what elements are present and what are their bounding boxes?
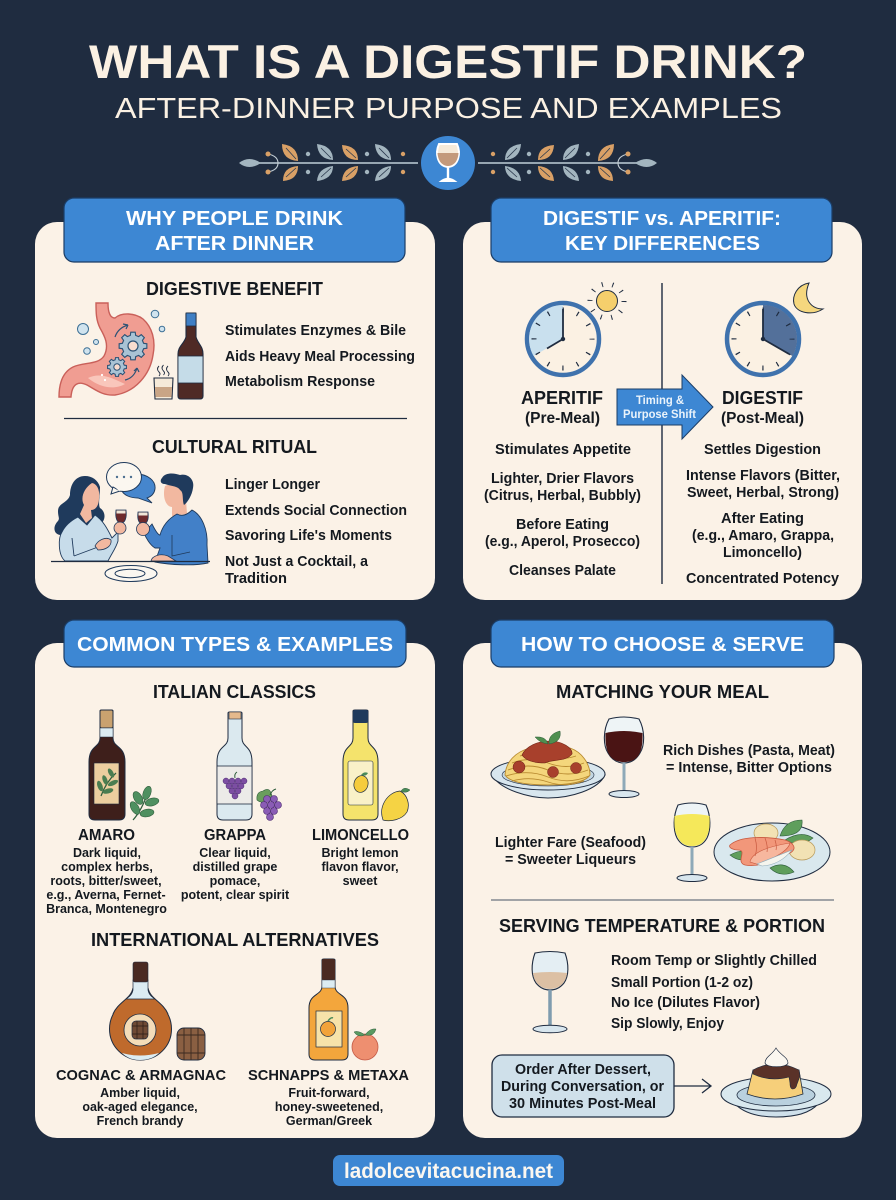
callout: when to order bbox=[492, 1055, 674, 1117]
heading: serving temperature and portion: SERVING TEMPERATURE & PORTION bbox=[499, 916, 825, 936]
list: digestif traits: Intense Flavors (Bitter, bbox=[686, 468, 840, 484]
list: aperitif traits bbox=[484, 442, 641, 579]
heading: international alternatives: INTERNATIONAL ALTERNATIVES bbox=[91, 930, 379, 950]
list: digestif traits: After Eating bbox=[721, 511, 804, 527]
label: schnapps and metaxa: honey-sweetened, bbox=[275, 1100, 383, 1114]
panel heading: HOW TO CHOOSE & SERVE bbox=[521, 634, 804, 656]
label: grappa: GRAPPA bbox=[204, 827, 266, 844]
arrow: timing and purpose shift bbox=[617, 375, 713, 439]
panel heading bbox=[64, 620, 406, 667]
label: amaro bbox=[46, 827, 167, 916]
panel heading: DIGESTIF vs. APERITIF: bbox=[543, 208, 781, 230]
panel: why people drink after dinner bbox=[35, 198, 435, 600]
heading: italian classics: ITALIAN CLASSICS bbox=[153, 682, 316, 702]
list: serving tips bbox=[611, 953, 817, 1032]
label: cognac and armagnac: Amber liquid, bbox=[100, 1086, 180, 1100]
label: aperitif: APERITIF bbox=[521, 388, 603, 408]
list: digestif traits: Settles Digestion bbox=[704, 442, 821, 458]
label: amaro: Branca, Montenegro bbox=[46, 902, 167, 916]
label: cognac and armagnac: oak-aged elegance, bbox=[82, 1100, 198, 1114]
list: digestive benefits: Aids Heavy Meal Processing bbox=[225, 349, 415, 365]
list: cultural ritual points bbox=[225, 477, 407, 587]
title: WHAT IS A DIGESTIF DRINK? bbox=[89, 35, 807, 88]
list: cultural ritual points: Extends Social Connection bbox=[225, 503, 407, 519]
panel heading: KEY DIFFERENCES bbox=[565, 233, 760, 255]
footer: website bbox=[333, 1155, 564, 1186]
label: schnapps and metaxa bbox=[248, 1067, 409, 1128]
label: amaro: complex herbs, bbox=[61, 860, 153, 874]
icon: grappa bottle bbox=[217, 712, 282, 820]
list: serving tips: Small Portion (1-2 oz) bbox=[611, 975, 753, 991]
label: schnapps and metaxa: German/Greek bbox=[286, 1114, 372, 1128]
label: cognac and armagnac: COGNAC & ARMAGNAC bbox=[56, 1067, 226, 1084]
label: aperitif: (Pre-Meal) bbox=[525, 410, 600, 427]
label: grappa: potent, clear spirit bbox=[181, 888, 290, 902]
icon: aperitif clock with sun bbox=[527, 284, 624, 375]
label: grappa: pomace, bbox=[210, 874, 260, 888]
icon: digestif clock with moon bbox=[727, 283, 823, 375]
list: cultural ritual points: Tradition bbox=[225, 571, 287, 587]
callout: when to order: Order After Dessert, bbox=[515, 1062, 651, 1078]
list: aperitif traits: (e.g., Aperol, Prosecco) bbox=[485, 534, 640, 550]
label: grappa: Clear liquid, bbox=[199, 846, 271, 860]
label: limoncello: Bright lemon bbox=[321, 846, 399, 860]
list: digestive benefits bbox=[225, 323, 415, 390]
icon: schnapps bottle and peach bbox=[309, 959, 378, 1060]
panel heading: WHY PEOPLE DRINK bbox=[126, 208, 344, 230]
icon: couple toasting at table bbox=[51, 462, 210, 582]
label: amaro: AMARO bbox=[78, 827, 135, 844]
label: limoncello: LIMONCELLO bbox=[312, 827, 409, 844]
label: schnapps and metaxa: Fruit-forward, bbox=[288, 1086, 370, 1100]
list: aperitif traits: Stimulates Appetite bbox=[495, 442, 631, 458]
arrow: timing and purpose shift: Timing & bbox=[636, 393, 684, 407]
list: aperitif traits: Lighter, Drier Flavors bbox=[491, 471, 634, 487]
label: limoncello: flavon flavor, bbox=[321, 860, 399, 874]
list: aperitif traits: Cleanses Palate bbox=[509, 563, 616, 579]
label: cognac and armagnac bbox=[56, 1067, 226, 1128]
icon: limoncello bottle bbox=[343, 710, 410, 821]
icon: flan dessert bbox=[721, 1048, 831, 1117]
icon: seafood plate bbox=[714, 820, 830, 881]
label: amaro: e.g., Averna, Fernet- bbox=[46, 888, 166, 902]
label: digestif: (Post-Meal) bbox=[721, 410, 804, 427]
label: limoncello: sweet bbox=[343, 874, 378, 888]
label: cognac and armagnac: French brandy bbox=[97, 1114, 183, 1128]
icon: red wine glass bbox=[604, 717, 644, 798]
label: amaro: Dark liquid, bbox=[73, 846, 141, 860]
icon: pasta plate bbox=[491, 731, 605, 798]
icon: cognac bottle and barrel bbox=[110, 962, 205, 1060]
arrow: timing and purpose shift: Purpose Shift bbox=[623, 407, 696, 421]
icon: stomach with gears bbox=[59, 303, 165, 397]
icon: amaro bottle bbox=[89, 710, 160, 820]
callout: when to order: During Conversation, or bbox=[501, 1079, 664, 1095]
label: aperitif bbox=[521, 388, 603, 427]
arrow: callout to dessert bbox=[674, 1079, 711, 1093]
list: serving tips: No Ice (Dilutes Flavor) bbox=[611, 995, 760, 1011]
label: limoncello bbox=[312, 827, 409, 888]
label: schnapps and metaxa: SCHNAPPS & METAXA bbox=[248, 1067, 409, 1084]
text: lighter fare: = Sweeter Liqueurs bbox=[505, 852, 636, 868]
label: digestif bbox=[721, 388, 804, 427]
list: digestive benefits: Stimulates Enzymes & Bile bbox=[225, 323, 406, 339]
list: digestif traits bbox=[686, 442, 840, 587]
text: lighter fare bbox=[495, 835, 646, 868]
panel heading bbox=[491, 620, 834, 667]
list: serving tips: Sip Slowly, Enjoy bbox=[611, 1016, 724, 1032]
list: cultural ritual points: Savoring Life's Moments bbox=[225, 528, 392, 544]
list: aperitif traits: (Citrus, Herbal, Bubbly) bbox=[484, 488, 641, 504]
heading: cultural ritual: CULTURAL RITUAL bbox=[152, 437, 317, 457]
list: digestive benefits: Metabolism Response bbox=[225, 374, 375, 390]
panel heading: COMMON TYPES & EXAMPLES bbox=[77, 634, 393, 656]
panel: digestif vs aperitif bbox=[463, 198, 862, 600]
list: digestif traits: Limoncello) bbox=[723, 545, 802, 561]
heading: matching your meal: MATCHING YOUR MEAL bbox=[556, 682, 769, 702]
list: cultural ritual points: Not Just a Cocktail, a bbox=[225, 554, 369, 570]
ornament: botanical divider with wine glass bbox=[239, 136, 657, 190]
list: serving tips: Room Temp or Slightly Chilled bbox=[611, 953, 817, 969]
label: amaro: roots, bitter/sweet, bbox=[50, 874, 162, 888]
label: grappa bbox=[181, 827, 290, 902]
text: rich dishes: Rich Dishes (Pasta, Meat) bbox=[663, 743, 835, 759]
heading: digestive benefit: DIGESTIVE BENEFIT bbox=[146, 279, 323, 299]
label: digestif: DIGESTIF bbox=[722, 388, 803, 408]
panel: common types and examples bbox=[35, 620, 435, 1138]
icon: white wine glass bbox=[674, 803, 710, 882]
panel heading bbox=[491, 198, 832, 262]
text: rich dishes bbox=[663, 743, 835, 776]
list: cultural ritual points: Linger Longer bbox=[225, 477, 320, 493]
list: digestif traits: (e.g., Amaro, Grappa, bbox=[692, 528, 834, 544]
panel heading bbox=[64, 198, 405, 262]
subtitle: AFTER-DINNER PURPOSE AND EXAMPLES bbox=[115, 93, 782, 125]
list: aperitif traits: Before Eating bbox=[516, 517, 609, 533]
list: digestif traits: Sweet, Herbal, Strong) bbox=[687, 485, 839, 501]
panel: how to choose and serve bbox=[463, 620, 862, 1138]
callout: when to order: 30 Minutes Post-Meal bbox=[509, 1096, 656, 1112]
icon: digestif glass bbox=[532, 952, 568, 1033]
icon: digestif bottle and glass bbox=[154, 313, 203, 399]
footer: website: ladolcevitacucina.net bbox=[344, 1160, 553, 1183]
list: digestif traits: Concentrated Potency bbox=[686, 571, 839, 587]
label: grappa: distilled grape bbox=[193, 860, 277, 874]
panel heading: AFTER DINNER bbox=[155, 233, 315, 255]
text: rich dishes: = Intense, Bitter Options bbox=[666, 760, 832, 776]
text: lighter fare: Lighter Fare (Seafood) bbox=[495, 835, 646, 851]
